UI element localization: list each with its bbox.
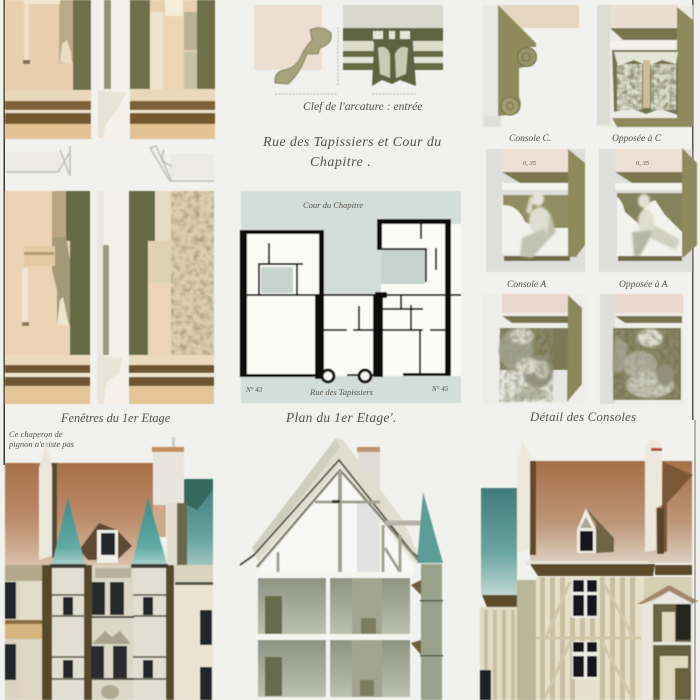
keystone elevation [343, 5, 443, 86]
dormer [79, 523, 132, 563]
panel: console details [483, 5, 697, 404]
caption: console details: Détail des Consoles [529, 410, 636, 424]
panel: first-floor window details [5, 0, 215, 404]
console C [483, 5, 579, 127]
section profile: top [91, 0, 127, 139]
plan rooms [244, 224, 461, 376]
plan background [241, 191, 461, 403]
opposite C [597, 5, 693, 127]
caption: plan: Plan du 1er Etage'. [285, 410, 397, 425]
note: pignon: Ce chaperon de [9, 429, 63, 439]
label: number 43: N° 43 [245, 386, 263, 394]
console A [486, 149, 585, 272]
porch [637, 585, 698, 700]
label: cour du chapitre: Cour du Chapitre [303, 200, 363, 210]
lower floor room [256, 634, 413, 697]
cornice plan sketches [6, 146, 214, 182]
half-timber facade [480, 577, 692, 700]
chimney [152, 437, 187, 568]
windows [480, 579, 598, 700]
caption: console C: Console C. [509, 134, 551, 144]
teal side roof [481, 488, 517, 595]
plan walls [240, 219, 461, 379]
console centre left [483, 294, 585, 404]
note: pignon: pignon n'existe pas [8, 439, 75, 449]
window detail: top right [130, 0, 215, 139]
title: street names: Rue des Tapissiers et Cour du [262, 135, 442, 150]
opposite A [599, 148, 697, 272]
upper floor room [256, 572, 413, 635]
plan courtyards [261, 250, 425, 293]
turret cones [50, 497, 168, 568]
gable interior [258, 470, 414, 572]
left elevation [5, 437, 213, 700]
left pier [517, 439, 530, 553]
pignon pier [39, 442, 52, 560]
centre section [240, 438, 443, 700]
label: rue des tapissiers: Rue des Tapissiers [309, 387, 374, 397]
chimney flue inside roof [357, 503, 380, 573]
right elevation [480, 439, 698, 700]
caption: console A: Console A [507, 280, 546, 290]
dormer [577, 508, 614, 553]
chimney [357, 447, 380, 500]
eaves [482, 561, 692, 607]
section profile: bottom [97, 191, 127, 404]
panel: keystone detail [254, 5, 443, 94]
caption: keystone: Clef de l'arcature : entrée [303, 100, 422, 113]
facade [5, 565, 213, 700]
caption: opposite C: Opposée à C [612, 134, 662, 144]
window detail: bottom left [5, 191, 90, 404]
subtitle: chapitre: Chapitre . [310, 155, 371, 170]
roof [5, 463, 153, 568]
roof [530, 461, 692, 563]
right pier [645, 440, 664, 554]
dimension lines [275, 27, 416, 94]
gable roof frame [240, 438, 422, 572]
keystone section [254, 5, 331, 84]
window detail: top left [5, 0, 91, 139]
dark piers [42, 565, 174, 700]
caption: opposite A: Opposée à A [619, 280, 668, 290]
teal side roof [183, 479, 213, 580]
label: number 45: N° 45 [431, 385, 449, 393]
caption: windows: Fenêtres du 1er Etage [60, 411, 171, 425]
dimension label: opposite A: 0, 35 [636, 160, 650, 167]
floor plan [240, 191, 461, 403]
turret bodies [52, 566, 166, 700]
tower [411, 492, 443, 700]
console centre right [600, 294, 684, 404]
window detail: bottom right with rubble wall [129, 191, 214, 404]
plan turret rounds [322, 370, 371, 382]
central bay [91, 568, 134, 700]
dimension label: console A: 0, 35 [523, 160, 537, 167]
